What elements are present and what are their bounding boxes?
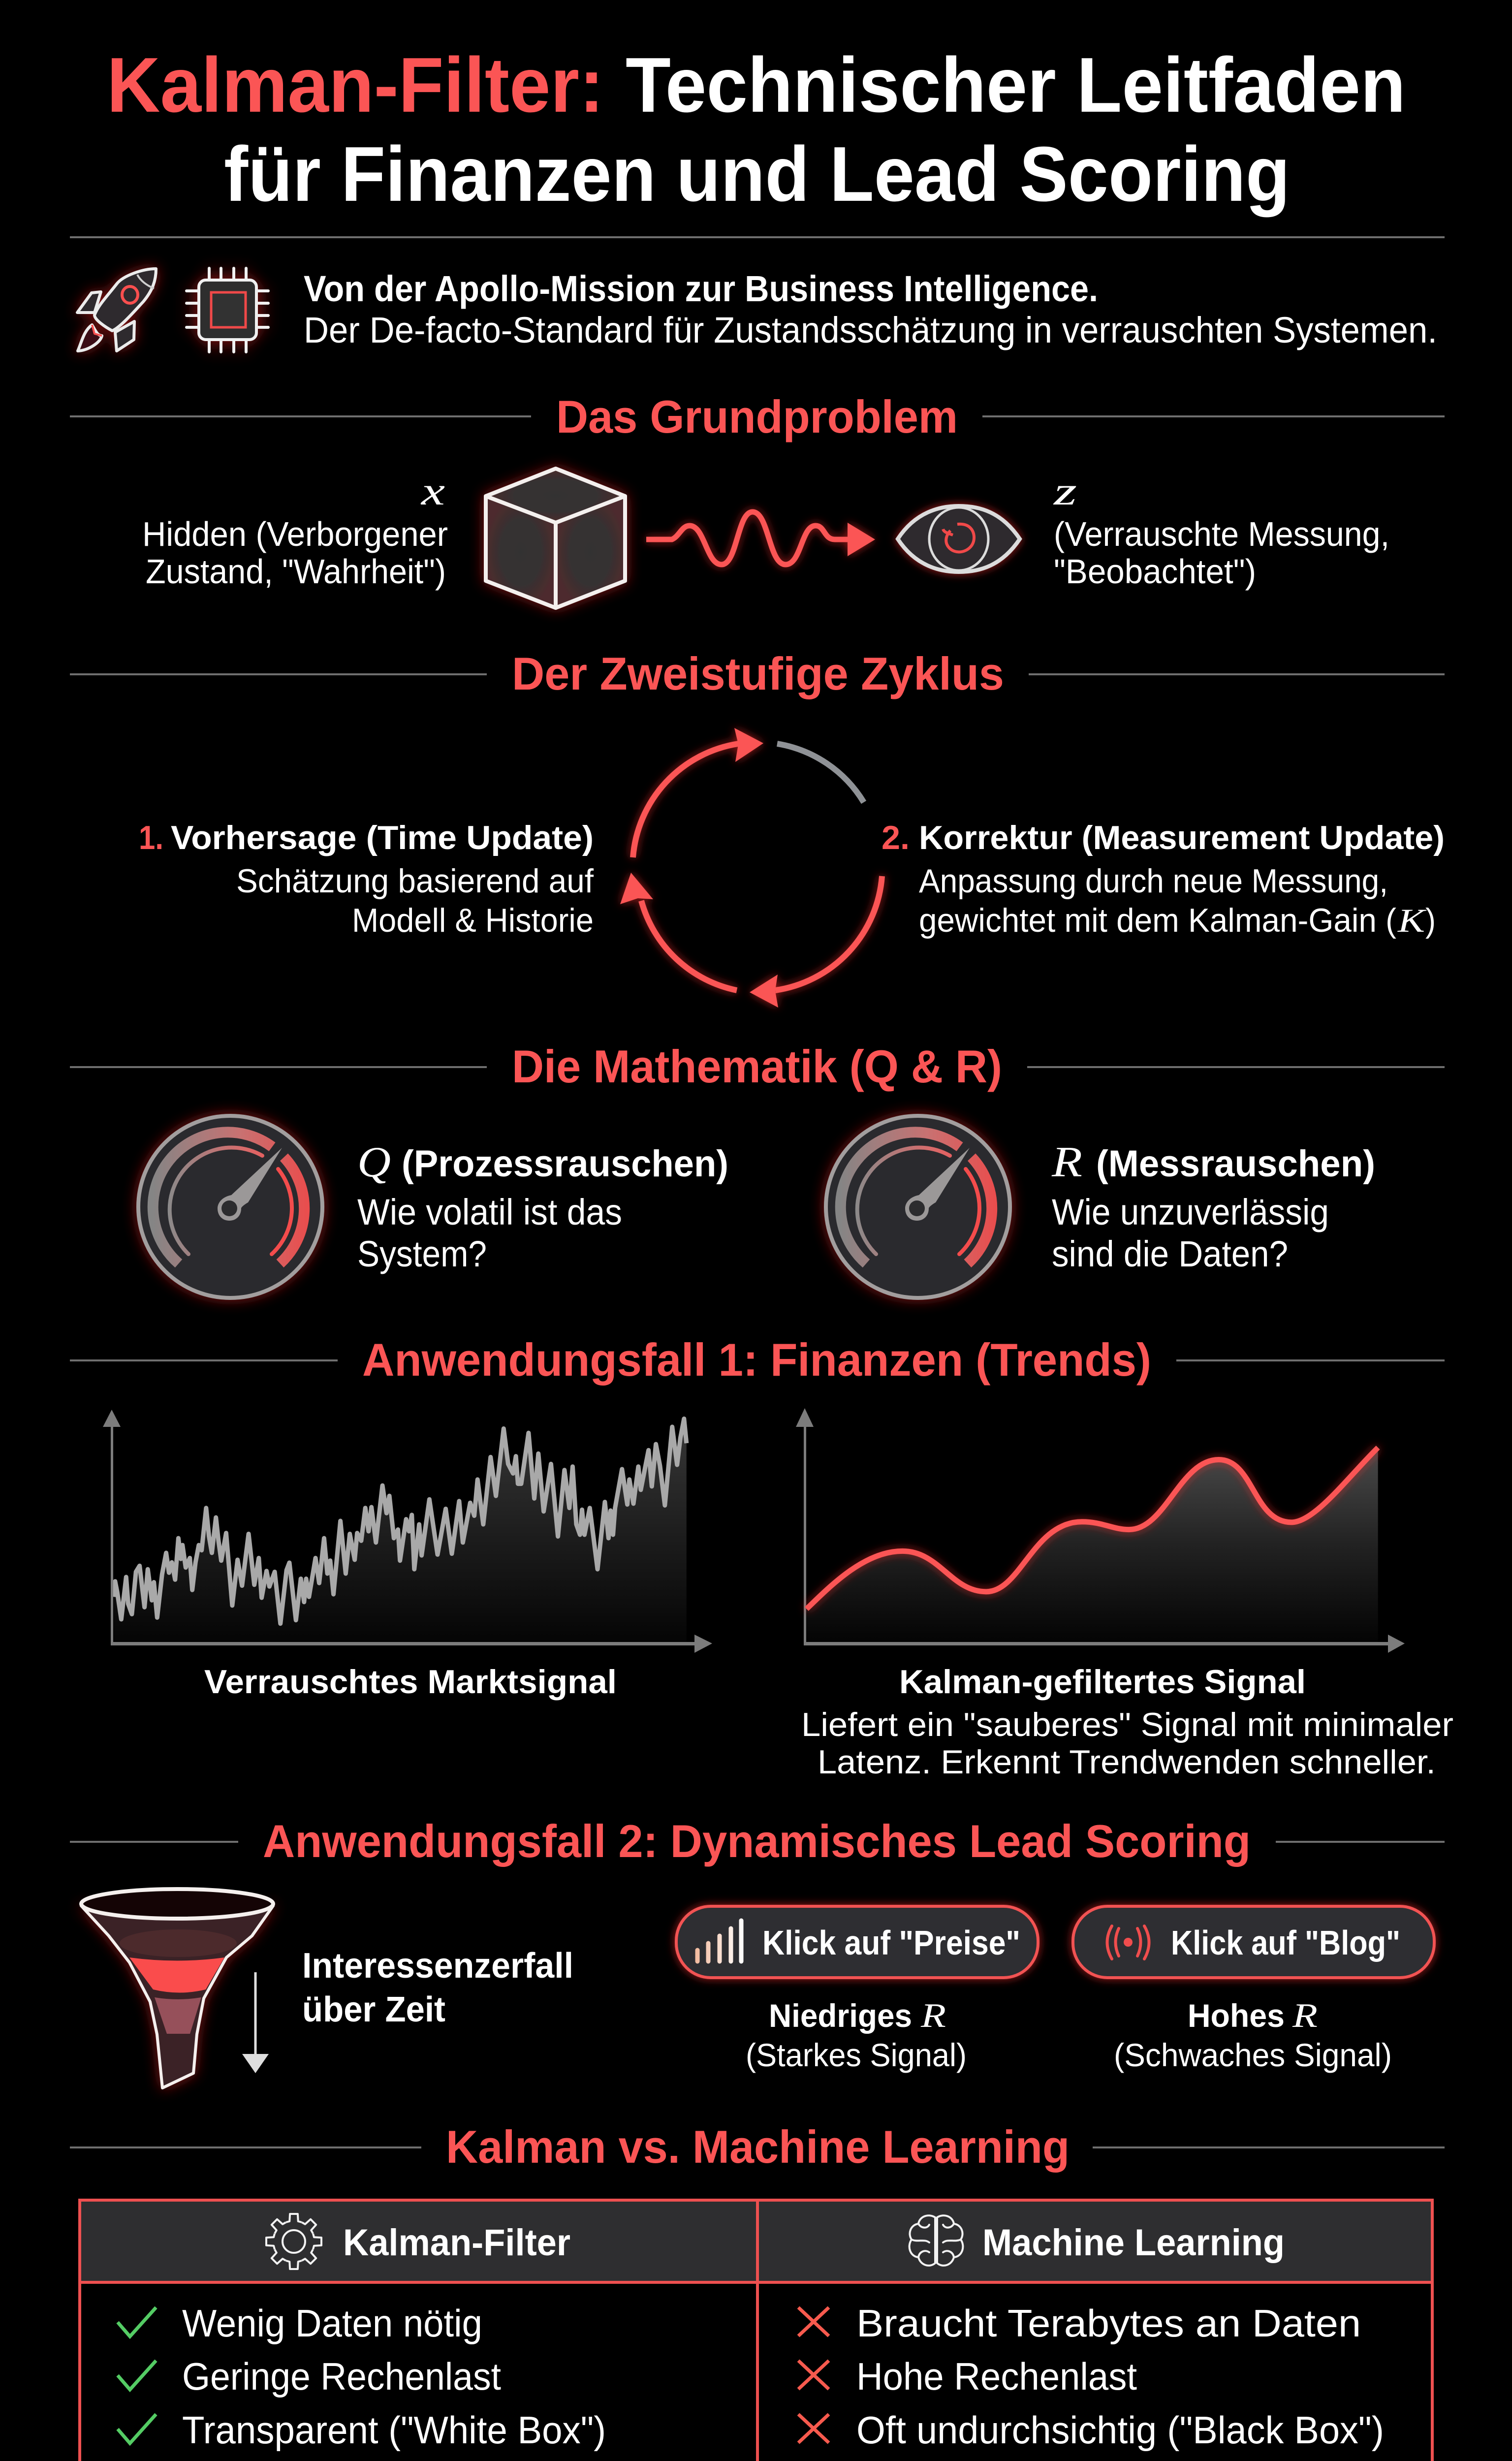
label: high R: (Schwaches Signal) xyxy=(1114,2037,1392,2073)
step 2 text: ) xyxy=(1425,902,1436,939)
step 2 text: 2. xyxy=(882,819,910,856)
column: Kalman-Filter: Wenig Daten nötig xyxy=(182,2302,482,2345)
step 2 text: Anpassung durch neue Messung, xyxy=(919,862,1388,900)
step 1 text xyxy=(139,819,594,939)
measurement text: z xyxy=(1053,469,1077,513)
step 2 text: K xyxy=(1397,902,1427,939)
chart axes xyxy=(103,1410,712,1653)
icons: crosses xyxy=(798,2307,829,2443)
column: Kalman-Filter xyxy=(118,2214,606,2452)
R text: R xyxy=(1051,1138,1082,1186)
heading: Die Mathematik: Die Mathematik (Q & R) xyxy=(512,1041,1002,1092)
chart axes xyxy=(796,1408,1405,1653)
Q text: (Prozessrauschen) xyxy=(402,1143,728,1185)
R text xyxy=(1051,1138,1375,1274)
label: high R: Hohes xyxy=(1188,1997,1285,2034)
label: low R: R xyxy=(920,1997,946,2035)
chart caption xyxy=(801,1663,1453,1781)
icon: gear xyxy=(266,2214,321,2269)
icon: broadcast xyxy=(1107,1926,1149,1959)
cycle diagram xyxy=(620,728,882,1008)
column: Machine Learning xyxy=(798,2215,1384,2452)
button: Blog: Klick auf "Blog" xyxy=(1171,1924,1400,1962)
table header xyxy=(80,2200,1432,2282)
icon: signal bars xyxy=(697,1921,741,1961)
arrow: grey arc xyxy=(777,744,864,802)
step 2 text: gewichtet mit dem Kalman-Gain ( xyxy=(919,902,1396,939)
icon: brain xyxy=(910,2215,963,2266)
panel: click Preise xyxy=(676,1906,1038,2073)
column: Machine Learning: Oft undurchsichtig ("Black Box") xyxy=(856,2408,1384,2452)
title: Technischer Leitfaden xyxy=(626,42,1406,128)
button: Preise xyxy=(676,1906,1038,1978)
title: für Finanzen und Lead Scoring xyxy=(224,131,1290,218)
hidden state text xyxy=(142,469,448,591)
kalman curve xyxy=(807,1448,1378,1609)
icons: checks xyxy=(118,2307,156,2443)
column: Machine Learning: Hohe Rechenlast xyxy=(856,2355,1137,2398)
hidden state text: Zustand, "Wahrheit") xyxy=(146,552,446,591)
step 2 text xyxy=(882,819,1445,939)
R text: sind die Daten? xyxy=(1052,1233,1288,1274)
hidden state text: x xyxy=(421,469,445,513)
column: Machine Learning: Braucht Terabytes an Daten xyxy=(856,2302,1361,2345)
column: Kalman-Filter: Transparent ("White Box") xyxy=(182,2408,606,2452)
chart caption: Kalman-gefiltertes Signal xyxy=(899,1663,1306,1701)
arrow: noisy wave xyxy=(646,512,875,565)
decay text: über Zeit xyxy=(302,1990,445,2029)
label: high R: R xyxy=(1292,1997,1318,2035)
arrow: right arc xyxy=(750,876,882,1008)
step 1 text: 1. xyxy=(139,819,163,856)
decay text: Interessenzerfall xyxy=(302,1946,573,1986)
column: Machine Learning: Machine Learning xyxy=(982,2222,1285,2264)
label: low R: Niedriges xyxy=(769,1997,912,2034)
measurement text xyxy=(1053,469,1389,591)
heading: Kalman vs ML: Kalman vs. Machine Learning xyxy=(446,2121,1070,2173)
icon: chip xyxy=(187,268,268,352)
measurement text: "Beobachtet") xyxy=(1054,552,1256,591)
label: low R xyxy=(746,1997,967,2073)
arrow: bottom arc xyxy=(620,873,737,990)
label: low R: (Starkes Signal) xyxy=(746,2037,967,2073)
chart: filtered signal xyxy=(796,1408,1453,1781)
panel: Q xyxy=(138,1116,728,1298)
icon: eye xyxy=(898,506,1020,572)
step 1 text: Schätzung basierend auf xyxy=(236,862,594,900)
table frame xyxy=(80,2200,1432,2461)
intro panel xyxy=(77,268,1437,352)
icon: rocket xyxy=(77,269,156,351)
comparison table xyxy=(80,2200,1432,2461)
Q text: Q xyxy=(357,1138,391,1186)
R text: (Messrauschen) xyxy=(1096,1143,1375,1185)
measurement text: (Verrauschte Messung, xyxy=(1054,515,1389,553)
heading: Anwendungsfall 2: Anwendungsfall 2: Dynamisches Lead Scoring xyxy=(263,1815,1251,1867)
intro text: Der De-facto-Standard für Zustandsschätzung in verrauschten Systemen. xyxy=(304,310,1437,350)
intro text: Von der Apollo-Mission zur Business Intelligence. xyxy=(304,268,1098,309)
decay text xyxy=(302,1946,573,2029)
R text: Wie unzuverlässig xyxy=(1052,1192,1329,1232)
chart caption: Verrauschtes Marktsignal xyxy=(204,1663,617,1701)
chart: noisy market signal xyxy=(103,1410,712,1701)
button: Preise: Klick auf "Preise" xyxy=(762,1924,1020,1962)
arrow: decay xyxy=(242,1972,269,2073)
heading: Anwendungsfall 1: Anwendungsfall 1: Finanzen (Trends) xyxy=(362,1334,1151,1386)
panel: cycle xyxy=(139,728,1445,1008)
icon: gauge R xyxy=(826,1116,1010,1298)
panel: R xyxy=(826,1116,1375,1298)
icon: cube xyxy=(486,469,625,608)
panel: lead funnel xyxy=(81,1889,573,2088)
icon: gauge Q xyxy=(138,1116,322,1298)
title xyxy=(107,42,1406,218)
heading: Der Zweistufige Zyklus: Der Zweistufige Zyklus xyxy=(512,648,1004,699)
chart caption: Latenz. Erkennt Trendwenden schneller. xyxy=(818,1743,1436,1781)
column: Kalman-Filter: Kalman-Filter xyxy=(343,2222,570,2264)
Q text: Wie volatil ist das xyxy=(357,1192,622,1232)
arrow: left arc xyxy=(633,728,763,857)
button: Blog xyxy=(1073,1906,1434,1978)
panel: click Blog xyxy=(1073,1906,1434,2073)
icon: funnel xyxy=(81,1889,273,2088)
Q text xyxy=(357,1138,728,1274)
step 1 text: Vorhersage (Time Update) xyxy=(171,819,594,856)
step 1 text: Modell & Historie xyxy=(352,902,594,939)
step 2 text: Korrektur (Measurement Update) xyxy=(919,819,1445,856)
panel: Grundproblem xyxy=(142,469,1389,608)
label: high R xyxy=(1114,1997,1392,2073)
title: Kalman-Filter: xyxy=(107,42,604,128)
Q text: System? xyxy=(357,1233,487,1274)
heading: Das Grundproblem: Das Grundproblem xyxy=(556,391,958,442)
column: Kalman-Filter: Geringe Rechenlast xyxy=(182,2355,501,2398)
intro text xyxy=(304,268,1437,350)
hidden state text: Hidden (Verborgener xyxy=(142,515,448,553)
chart caption: Liefert ein "sauberes" Signal mit minimaler xyxy=(801,1706,1453,1743)
